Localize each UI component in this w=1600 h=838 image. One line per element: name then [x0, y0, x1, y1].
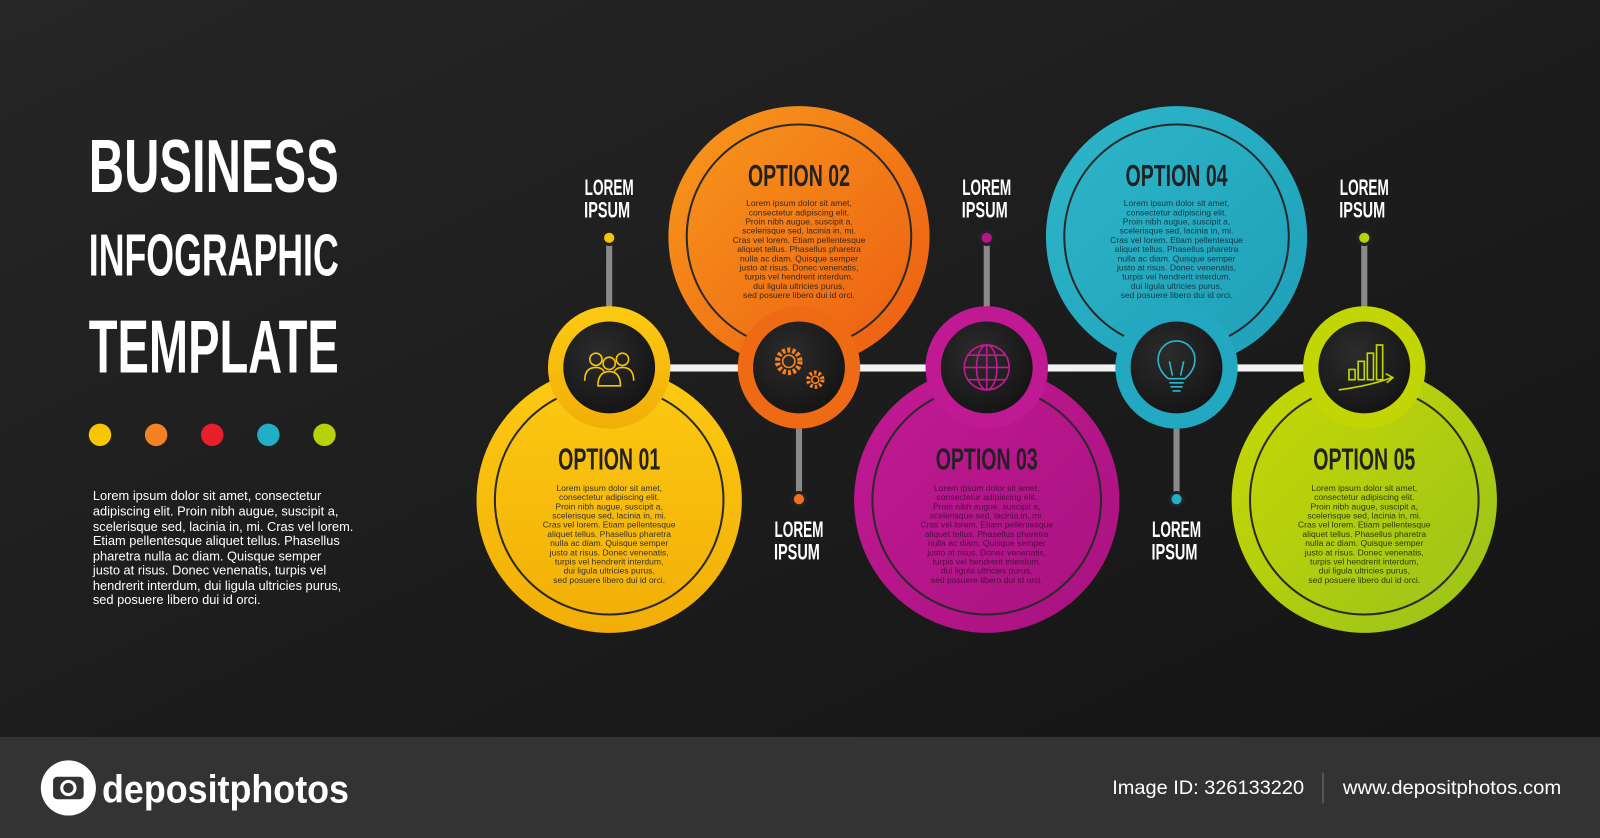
title: INFOGRAPHIC: [89, 222, 339, 289]
panel: option 01: Cras vel lorem. Etiam pellentesque: [543, 520, 676, 530]
panel: option 03: dui ligula ultricies purus,: [941, 566, 1032, 576]
panel: option 03: sed posuere libero dui id orci.: [931, 575, 1043, 585]
title: TEMPLATE: [89, 306, 339, 390]
footer logo: depositphotos: [102, 768, 349, 811]
panel: option 03: justo at risus. Donec venenatis,: [926, 547, 1046, 557]
intro paragraph: scelerisque sed, lacinia in, mi. Cras vel lorem.: [93, 519, 353, 534]
panel: option 01: [477, 306, 742, 633]
lorem ipsum labels: IPSUM: [584, 197, 630, 222]
stem dots: [601, 230, 1372, 507]
panel: option 04: justo at risus. Donec venenatis,: [1116, 262, 1236, 272]
panel: option 04: OPTION 04: [1126, 159, 1228, 193]
panel: option 01: justo at risus. Donec venenatis,: [549, 547, 669, 557]
panel: option 01: nulla ac diam. Quisque semper: [550, 538, 668, 548]
lorem ipsum labels: IPSUM: [962, 197, 1008, 222]
panel: option 01: consectetur adipiscing elit.: [559, 492, 659, 502]
panel: option 02: justo at risus. Donec venenatis,: [738, 262, 858, 272]
lorem ipsum labels: LOREM: [1340, 175, 1389, 200]
panel: option 05: nulla ac diam. Quisque semper: [1305, 538, 1423, 548]
panel: option 05: scelerisque sed, lacinia in, mi.: [1307, 511, 1421, 521]
panel: option 01: OPTION 01: [558, 443, 660, 477]
panel: option 03: OPTION 03: [936, 443, 1038, 477]
stems: [606, 245, 1367, 495]
panel: option 05: consectetur adipiscing elit.: [1314, 492, 1414, 502]
title: BUSINESS: [89, 125, 339, 209]
panel: option 01: scelerisque sed, lacinia in, mi.: [552, 511, 666, 521]
intro paragraph: sed posuere libero dui id orci.: [93, 592, 261, 607]
panel: option 02: aliquet tellus. Phasellus pharetra: [737, 244, 861, 254]
panel: option 03: Lorem ipsum dolor sit amet,: [934, 483, 1040, 493]
panel: option 02: dui ligula ultricies purus,: [753, 281, 845, 291]
panel: option 01: Proin nibh augue, suscipit a,: [555, 501, 663, 511]
icon: light bulb: [1158, 341, 1195, 391]
panel: option 05: turpis vel hendrerit interdum,: [1310, 556, 1419, 566]
panel: option 03: turpis vel hendrerit interdum,: [932, 556, 1041, 566]
color dots: [89, 424, 336, 446]
panel: option 04: turpis vel hendrerit interdum,: [1122, 272, 1231, 282]
panel: option 01: Lorem ipsum dolor sit amet,: [556, 483, 662, 493]
panel: option 02: consectetur adipiscing elit.: [749, 207, 849, 217]
panel: option 05: OPTION 05: [1313, 443, 1415, 477]
panel: option 02: scelerisque sed, lacinia in, mi.: [742, 226, 856, 236]
intro paragraph: hendrerit interdum, dui ligula ultricies purus,: [93, 578, 341, 593]
lorem ipsum labels: IPSUM: [1339, 197, 1385, 222]
footer id text: [1112, 773, 1561, 803]
panel: option 01: turpis vel hendrerit interdum,: [555, 556, 663, 566]
footer id text: Image ID: 326133220: [1112, 777, 1304, 799]
panel: option 03: aliquet tellus. Phasellus pharetra: [925, 529, 1049, 539]
icon: people: [585, 353, 634, 386]
panel: option 04: Lorem ipsum dolor sit amet,: [1124, 198, 1229, 208]
footer id text: www.depositphotos.com: [1342, 777, 1561, 799]
icon: gears: [778, 350, 822, 387]
panel: option 02: Cras vel lorem. Etiam pellentesque: [733, 235, 866, 245]
panel: option 03: consectetur adipiscing elit.: [937, 492, 1037, 502]
panel: option 04: [1046, 106, 1307, 429]
panel: option 05: Cras vel lorem. Etiam pellentesque: [1298, 520, 1431, 530]
panel: option 02: nulla ac diam. Quisque semper: [740, 253, 858, 263]
panel: option 02: OPTION 02: [748, 159, 850, 193]
intro paragraph: justo at risus. Donec venenatis, turpis vel: [92, 563, 326, 578]
panel: option 04: nulla ac diam. Quisque semper: [1118, 253, 1236, 263]
panel: option 05: dui ligula ultricies purus,: [1319, 566, 1410, 576]
panel: option 03: Cras vel lorem. Etiam pellentesque: [920, 520, 1053, 530]
panel: option 02: sed posuere libero dui id orci.: [743, 290, 855, 300]
panel: option 04: sed posuere libero dui id orci.: [1121, 290, 1232, 300]
panel: option 03: scelerisque sed, lacinia in, mi.: [930, 511, 1044, 521]
panel: option 05: aliquet tellus. Phasellus pharetra: [1302, 529, 1426, 539]
panel: option 04: scelerisque sed, lacinia in, mi.: [1120, 226, 1233, 236]
panel: option 05: Proin nibh augue, suscipit a,: [1311, 501, 1418, 511]
panel: option 04: Cras vel lorem. Etiam pellentesque: [1110, 235, 1243, 245]
panel: option 04: consectetur adipiscing elit.: [1126, 207, 1227, 217]
footer bar: [0, 737, 1600, 838]
panel: option 04: dui ligula ultricies purus,: [1131, 281, 1222, 291]
panel: option 02: turpis vel hendrerit interdum,: [745, 272, 853, 282]
panel: option 01: dui ligula ultricies purus,: [563, 566, 655, 576]
intro paragraph: [92, 488, 353, 607]
panel: option 05: Lorem ipsum dolor sit amet,: [1311, 483, 1417, 493]
intro paragraph: pharetra nulla ac diam. Quisque semper: [93, 548, 322, 563]
lorem ipsum labels: LOREM: [585, 175, 634, 200]
intro paragraph: adipiscing elit. Proin nibh augue, suscipit a,: [93, 503, 338, 518]
panel: option 03: nulla ac diam. Quisque semper: [928, 538, 1046, 548]
panel: option 04: aliquet tellus. Phasellus pharetra: [1115, 244, 1239, 254]
footer logo: [41, 760, 349, 816]
panel: option 05: sed posuere libero dui id orci.: [1308, 575, 1420, 585]
lorem ipsum labels: IPSUM: [774, 539, 820, 564]
icon: globe: [964, 345, 1009, 390]
title: [89, 125, 339, 390]
connector line: [612, 364, 1347, 372]
panel: option 02: Proin nibh augue, suscipit a,: [745, 217, 853, 227]
panel: option 02: [668, 106, 930, 429]
intro paragraph: Lorem ipsum dolor sit amet, consectetur: [93, 488, 322, 503]
panel: option 05: [1232, 306, 1497, 633]
panel: option 01: sed posuere libero dui id orci.: [553, 575, 665, 585]
panel: option 01: aliquet tellus. Phasellus pharetra: [547, 529, 671, 539]
panel: option 05: justo at risus. Donec venenatis,: [1304, 547, 1424, 557]
icon: growth chart: [1339, 345, 1393, 390]
lorem ipsum labels: LOREM: [774, 517, 823, 542]
lorem ipsum labels: [584, 175, 1389, 564]
lorem ipsum labels: IPSUM: [1152, 539, 1197, 564]
panel: option 03: [854, 306, 1119, 633]
lorem ipsum labels: LOREM: [1152, 517, 1201, 542]
lorem ipsum labels: LOREM: [962, 175, 1011, 200]
panel: option 03: Proin nibh augue, suscipit a,: [933, 501, 1041, 511]
intro paragraph: Etiam pellentesque aliquet tellus. Phasellus: [93, 533, 340, 548]
panel: option 02: Lorem ipsum dolor sit amet,: [746, 198, 852, 208]
panel: option 04: Proin nibh augue, suscipit a,: [1123, 217, 1230, 227]
